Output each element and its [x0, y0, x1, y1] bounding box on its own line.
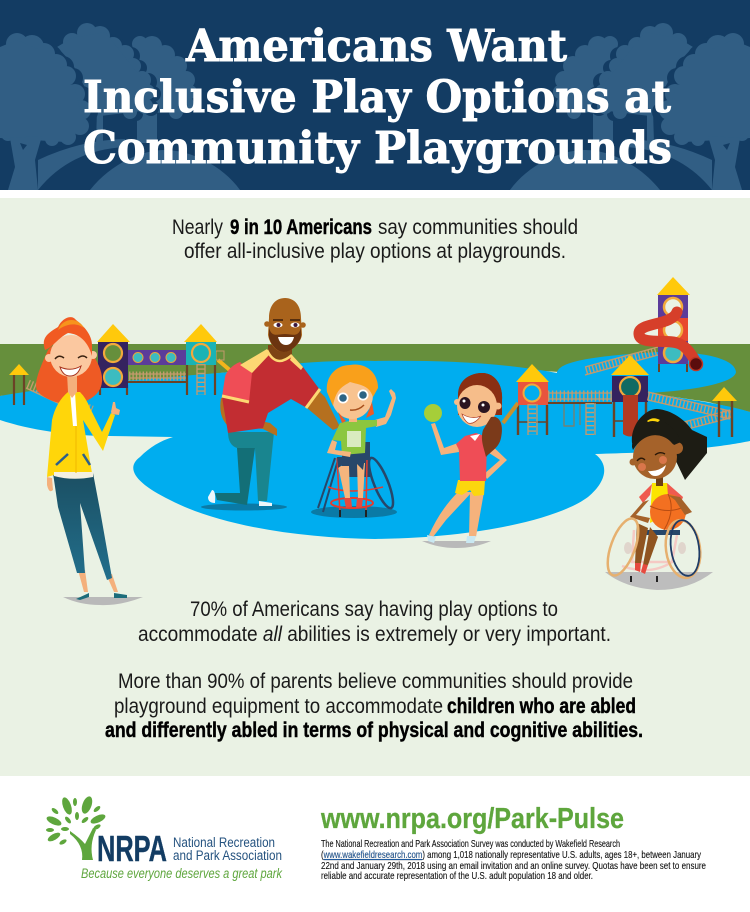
- face: [457, 385, 497, 427]
- tagline: Because everyone deserves a great park: [81, 866, 283, 881]
- arms: [630, 500, 650, 523]
- beard: [269, 328, 301, 352]
- intro text: say communities should: [378, 216, 578, 239]
- panel: pale green content background: [0, 198, 750, 776]
- character: woman in yellow jacket: [36, 317, 143, 605]
- hair top: [44, 317, 92, 356]
- seat back: [342, 442, 370, 477]
- association name: National Recreation: [173, 835, 275, 850]
- legs: [635, 523, 658, 565]
- shadow: [201, 504, 287, 510]
- arms: [431, 423, 459, 455]
- statistic text: 70 percent: 70% of Americans say having play options to: [190, 598, 558, 621]
- statistic text: 70 percent: [138, 598, 611, 646]
- hair back: [458, 373, 502, 415]
- neck: [656, 476, 663, 486]
- grass band: [0, 344, 750, 412]
- raised arm: [375, 389, 396, 427]
- character: girl with ball: [422, 373, 507, 548]
- icon: tree: [45, 795, 107, 860]
- association name: and Park Association: [173, 848, 282, 863]
- ankles: [78, 570, 118, 592]
- survey methodology note: The National Recreation and Park Association Survey was conducted by Wakefield Research: [321, 838, 620, 850]
- playground right: [503, 277, 737, 437]
- statistic text: 90 percent of parents: playground equipment to accommodate: [114, 695, 443, 718]
- basketball: [650, 494, 686, 530]
- seat: [643, 530, 680, 535]
- fringe: [632, 419, 681, 450]
- playground left: [9, 324, 232, 410]
- back hair: [36, 343, 102, 404]
- eyes and smile: [460, 397, 470, 409]
- shelter: [9, 364, 29, 405]
- panel: header banner: [0, 0, 750, 190]
- tree silhouettes right: [510, 23, 750, 190]
- body: [650, 483, 676, 523]
- tower teal: [184, 324, 232, 395]
- shoes: [344, 498, 363, 508]
- website url: www.nrpa.org/Park-Pulse: [320, 803, 624, 835]
- character: man kneeling: [201, 298, 340, 510]
- character: boy in wheelchair: [311, 364, 398, 518]
- survey methodology note: reliable and accurate representation of the U.S. adult population 18 and older.: [321, 870, 593, 882]
- shadow: [605, 572, 713, 590]
- title: [83, 21, 672, 174]
- casters: [631, 576, 657, 582]
- face: [331, 371, 373, 419]
- arms: [220, 398, 277, 436]
- wheels: [318, 458, 338, 512]
- legs: [53, 473, 112, 580]
- survey methodology note: [321, 838, 706, 882]
- head: [268, 298, 302, 352]
- eyes and smile: [338, 392, 348, 404]
- title: Americans Want: [185, 21, 568, 72]
- character: girl in wheelchair with basketball: [601, 409, 713, 590]
- legs: [429, 492, 484, 537]
- tree silhouettes left: [0, 23, 240, 190]
- intro text: [172, 216, 578, 263]
- statistic text: 90 percent of parents: [105, 670, 643, 742]
- shoes: [76, 593, 127, 600]
- wheelchair frame: [622, 530, 677, 570]
- hair: [327, 364, 378, 406]
- shorts: [455, 480, 485, 496]
- wheels: [601, 515, 645, 579]
- blue play surface: [0, 352, 750, 539]
- swings: [564, 404, 586, 426]
- light front leg: [228, 432, 274, 501]
- association name: [173, 835, 282, 863]
- legs: [338, 463, 365, 498]
- middle play structure: [503, 355, 649, 437]
- intro text: Nearly: [172, 216, 223, 239]
- frame hubs: [624, 542, 632, 554]
- NRPA wordmark: NRPA: [97, 828, 167, 869]
- shadow: [63, 597, 143, 605]
- statistic text: 90 percent of parents: children who are abled: [447, 695, 636, 718]
- title: Inclusive Play Options at: [83, 72, 672, 123]
- hair: [632, 409, 707, 480]
- jacket: [47, 392, 115, 477]
- neck: [349, 414, 357, 422]
- ramp: [26, 384, 92, 410]
- left arm: [327, 440, 351, 457]
- neck: [268, 345, 292, 364]
- intro text: offer all-inclusive play options at playgrounds.: [184, 240, 566, 263]
- upper ramp: [585, 347, 658, 375]
- shadow: [422, 541, 491, 548]
- ball: [424, 404, 442, 422]
- shadow: [311, 506, 397, 518]
- ponytail: [482, 417, 502, 457]
- tower purple: [97, 324, 130, 395]
- title: Community Playgrounds: [83, 123, 672, 174]
- red frame: [331, 498, 373, 508]
- face: [633, 435, 677, 479]
- bridge: [128, 350, 187, 382]
- face details: [55, 356, 87, 359]
- right ramps: [648, 392, 730, 431]
- neck and face: [67, 373, 77, 398]
- shoes: [208, 490, 272, 506]
- cheeks and smile: [638, 463, 646, 471]
- shirt: [456, 433, 487, 481]
- shirt: [222, 350, 320, 433]
- hands: [47, 402, 120, 491]
- shorts: [337, 457, 365, 470]
- illustration: playground scene: [0, 277, 750, 605]
- intro text: 9 in 10 Americans: [230, 216, 372, 239]
- eyes and smile: [274, 322, 282, 328]
- dark back leg: [215, 448, 255, 505]
- statistic text: 70 percent: accommodate all abilities is extremely or very important.: [138, 623, 611, 646]
- logo: NRPA: [45, 795, 283, 881]
- right shelter: [712, 387, 737, 437]
- shirt: [332, 420, 377, 455]
- tall tower with spiral slide: [639, 277, 702, 372]
- statistic text: 90 percent of parents: More than 90% of parents believe communities should provide: [118, 670, 633, 693]
- shoes: [427, 535, 476, 543]
- statistic text: 90 percent of parents: and differently abled in terms of physical and cognitive abilities.: [105, 719, 643, 742]
